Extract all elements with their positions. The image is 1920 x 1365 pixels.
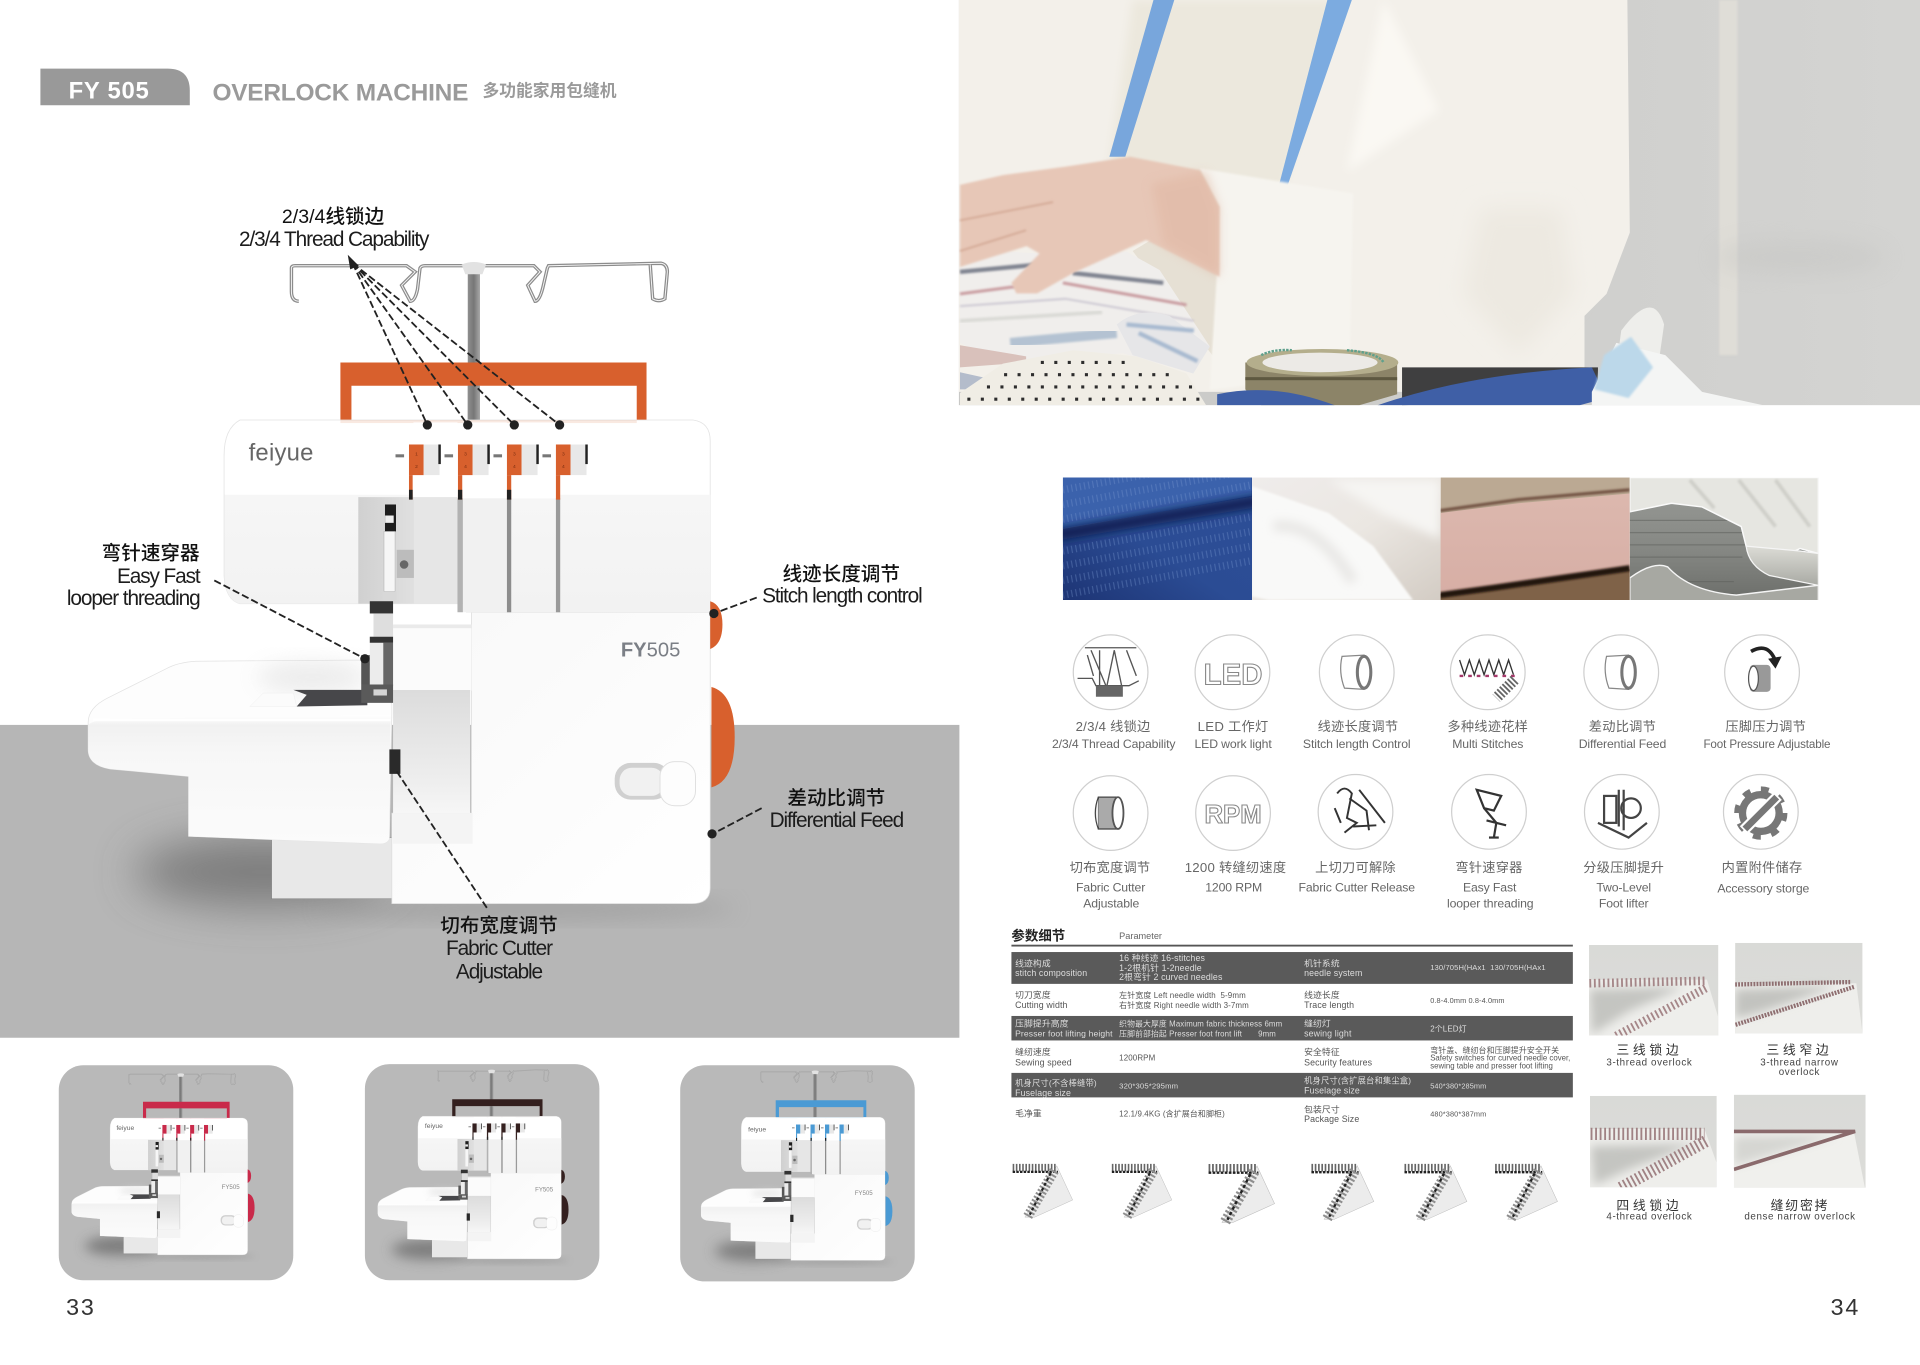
parameter table: 缝纫灯 [1304, 1018, 1331, 1029]
thumbnail: red variant: FY505 [222, 1184, 240, 1191]
parameter table: 线迹构成 [1015, 958, 1051, 969]
feature: LED: LED 工作灯 [1198, 719, 1268, 734]
parameter table: 1200RPM [1119, 1053, 1155, 1062]
parameter table: 织物最大厚度 Maximum fabric thickness 6mm [1119, 1019, 1282, 1029]
feature: RPM: RPM [1204, 801, 1262, 829]
feature: two-level lifter [1583, 774, 1664, 910]
parameter table: Package Size [1304, 1114, 1359, 1124]
callout text: thread capability [239, 206, 430, 251]
floor band behind machine [0, 725, 959, 1038]
callout: looper threading: looper threading [67, 587, 200, 610]
feature: RPM: 1200 转缝纫速度 [1185, 860, 1286, 875]
parameter table: Presser foot lifting height [1015, 1029, 1113, 1039]
hero sewing machine: 4 [464, 464, 467, 470]
page number 33: 33 [66, 1294, 96, 1320]
stitch sample: 3-thread narrow [1735, 943, 1862, 1078]
parameter table: Fuselage size [1304, 1085, 1360, 1095]
feature: 2/3/4 thread: 2/3/4 Thread Capability [1052, 737, 1176, 751]
stitch sample: 4-thread overlock: 4-thread overlock [1606, 1212, 1692, 1223]
feature: multi stitches: 多种线迹花样 [1447, 718, 1528, 734]
parameter table: 16 种线迹 16-stitches [1119, 952, 1205, 963]
feature: foot pressure: 压脚压力调节 [1725, 719, 1806, 734]
thumbnail: red variant: feiyue [116, 1125, 135, 1132]
feature: multi stitches [1447, 635, 1528, 751]
feature: foot pressure: Foot Pressure Adjustable [1703, 738, 1830, 751]
hero sewing machine [88, 262, 735, 918]
callout: looper threading: Easy Fast [117, 565, 201, 588]
callout: looper threading: 弯针速穿器 [102, 543, 200, 565]
feature: cutter width: 切布宽度调节 [1070, 859, 1150, 875]
product title [212, 79, 617, 106]
feature: accessory storage [1717, 774, 1810, 896]
feature: RPM: 1200 RPM [1205, 880, 1262, 894]
stitch sample: 3-thread narrow: overlock [1779, 1067, 1820, 1078]
hero sewing machine: 1 [415, 452, 418, 458]
parameter table: 压脚提升高度 [1015, 1018, 1069, 1029]
parameter table: sewing light [1304, 1029, 1352, 1039]
hero sewing machine: 3 [464, 452, 467, 458]
parameter table: 2个LED灯 [1430, 1024, 1467, 1034]
feature: 2/3/4 thread: 2/3/4 线锁边 [1076, 719, 1151, 734]
hero sewing machine: 4 [513, 464, 516, 470]
parameter table heading: 参数细节 [1011, 927, 1065, 943]
feature: two-level lifter: Foot lifter [1599, 896, 1649, 910]
stitch sample: 3-thread narrow: 3-thread narrow [1760, 1057, 1839, 1068]
parameter table: Sewing speed [1015, 1057, 1072, 1067]
parameter table: 机针系统 [1304, 958, 1340, 969]
feature: cutter width: Fabric Cutter [1076, 880, 1145, 894]
callout: thread capability leaders [348, 255, 564, 430]
parameter table: 1-2根机针 1-2needle [1119, 962, 1202, 973]
callout: differential feed: 差动比调节 [787, 787, 885, 809]
stitch sample: 3-thread overlock: 三线锁边 [1616, 1042, 1682, 1057]
feature: looper threader: looper threading [1447, 896, 1534, 910]
parameter table: 左针宽度 Left needle width 5-9mm [1119, 990, 1246, 1000]
callout: differential feed: Differential Feed [770, 809, 904, 832]
thumbnail: red variant [59, 1065, 293, 1280]
stitch sample: 4-thread overlock [1589, 1096, 1717, 1223]
feature: LED: LED work light [1194, 737, 1272, 751]
parameter table: Security features [1304, 1057, 1373, 1067]
callout: looper threading [67, 543, 370, 663]
feature: cutter release: 上切刀可解除 [1315, 860, 1396, 875]
feature: foot pressure [1703, 635, 1830, 751]
product title: OVERLOCK MACHINE [212, 79, 468, 106]
parameter table heading: Parameter [1119, 931, 1162, 941]
parameter table: 切刀宽度 [1015, 989, 1051, 1000]
feature: accessory storage: Accessory storge [1717, 882, 1810, 896]
stitch sample: 3-thread narrow: 三线窄边 [1766, 1042, 1832, 1057]
parameter table: 480*380*387mm [1430, 1110, 1486, 1119]
parameter table: 包装尺寸 [1304, 1103, 1340, 1114]
feature: looper threader: 弯针速穿器 [1455, 859, 1523, 875]
callout text: thread capability: 2/3/4 Thread Capability [239, 228, 430, 251]
stitch sample: 3-thread overlock: 3-thread overlock [1606, 1057, 1692, 1068]
callout: stitch length [709, 563, 922, 618]
callout: differential feed [707, 787, 904, 839]
parameter table heading [1011, 927, 1573, 947]
thumbnail: blue variant [680, 1065, 915, 1281]
parameter table: 机身尺寸(含扩展台和集尘盒) [1304, 1076, 1411, 1086]
hero photo: tailor with measuring tape [959, 0, 1920, 405]
parameter table: 缝纫速度 [1015, 1046, 1051, 1057]
callout: fabric cutter [397, 771, 558, 983]
feature: stitch length [1303, 635, 1411, 751]
thumbnail: dark brown variant: feiyue [425, 1123, 443, 1130]
stitch sample: 4-thread overlock: 四线锁边 [1616, 1198, 1682, 1213]
feature: stitch length: Stitch length Control [1303, 737, 1411, 751]
parameter table: 2根弯针 2 curved needles [1119, 971, 1223, 982]
callout: fabric cutter: 切布宽度调节 [440, 915, 558, 937]
hero sewing machine: 3 [562, 452, 565, 458]
fabric swatch: pink cotton [1440, 478, 1630, 606]
hero sewing machine: 4 [562, 464, 565, 470]
hero sewing machine: FY505 [621, 639, 680, 661]
parameter table: needle system [1304, 968, 1362, 978]
parameter table: 弯针盖、缝纫台和压脚提升安全开关 [1430, 1045, 1559, 1055]
model tab heading: FY 505 [69, 78, 149, 105]
thumbnail: dark brown variant: FY505 [535, 1186, 554, 1193]
parameter table: 安全特征 [1304, 1046, 1340, 1057]
stitch sample: dense narrow [1734, 1095, 1866, 1223]
feature: 2/3/4 thread [1052, 635, 1176, 751]
feature: LED: LED [1204, 658, 1262, 691]
fabric swatch: white terry [1251, 478, 1441, 600]
parameter table: 320*305*295mm [1119, 1082, 1178, 1091]
feature: two-level lifter: Two-Level [1596, 880, 1651, 894]
feature: cutter width [1070, 776, 1150, 910]
parameter table: 12.1/9.4KG (含扩展台和脚柜) [1119, 1109, 1225, 1119]
parameter table: Cutting width [1015, 1000, 1068, 1010]
callout: fabric cutter: Adjustable [456, 960, 543, 983]
parameter table: Fuselage size [1015, 1088, 1071, 1098]
callout text: thread capability: 2/3/4线锁边 [282, 206, 385, 228]
parameter table: Safety switches for curved needle cover, [1430, 1053, 1570, 1062]
parameter table: 机身尺寸(不含棒缝带) [1015, 1078, 1097, 1088]
stitch sample: dense narrow: 缝纫密拷 [1771, 1198, 1829, 1213]
product title: 多功能家用包缝机 [482, 81, 617, 101]
parameter table: 130/705H(HAx1 130/705H(HAx1 [1430, 963, 1546, 972]
model tab heading [40, 69, 190, 105]
feature: looper threader: Easy Fast [1463, 880, 1517, 894]
feature: differential feed [1579, 635, 1666, 751]
parameter table: 压脚前部抬起 Presser foot front lift 9mm [1119, 1029, 1276, 1039]
parameter table: 线迹长度 [1304, 989, 1340, 1000]
hero sewing machine: feiyue [249, 439, 314, 466]
callout: stitch length: 线迹长度调节 [782, 563, 900, 585]
parameter table: 540*380*285mm [1430, 1082, 1486, 1091]
callout: stitch length: Stitch length control [762, 584, 922, 607]
feature: multi stitches: Multi Stitches [1452, 737, 1523, 751]
parameter table: Trace length [1304, 1000, 1354, 1010]
stitch diagrams row [1013, 1166, 1558, 1223]
feature: differential feed: 差动比调节 [1589, 719, 1656, 734]
parameter table: stitch composition [1015, 968, 1087, 978]
thumbnail: dark brown variant [365, 1064, 599, 1280]
parameter table: 右针宽度 Right needle width 3-7mm [1119, 1000, 1249, 1010]
parameter table [1011, 952, 1573, 1124]
feature: cutter release: Fabric Cutter Release [1299, 880, 1415, 894]
parameter table: sewing table and presser foot lifting [1430, 1061, 1553, 1070]
feature: LED [1194, 635, 1272, 751]
parameter table: 0.8-4.0mm 0.8-4.0mm [1430, 996, 1505, 1005]
feature: cutter release [1299, 774, 1415, 894]
fabric swatch: blue denim [1062, 478, 1252, 600]
feature: stitch length: 线迹长度调节 [1318, 719, 1398, 734]
hero sewing machine: 3 [513, 452, 516, 458]
page number 34: 34 [1831, 1294, 1860, 1320]
fabric swatch: grey organza [1630, 478, 1818, 606]
feature: two-level lifter: 分级压脚提升 [1583, 860, 1664, 875]
feature: RPM [1185, 776, 1286, 894]
stitch sample: 3-thread overlock [1588, 945, 1718, 1068]
feature: cutter width: Adjustable [1083, 896, 1139, 910]
parameter table: 毛净重 [1015, 1108, 1042, 1119]
thumbnail: blue variant: FY505 [855, 1190, 873, 1197]
hero sewing machine: 2 [415, 464, 418, 470]
feature: accessory storage: 内置附件储存 [1722, 860, 1802, 875]
feature: differential feed: Differential Feed [1579, 737, 1666, 751]
callout: fabric cutter: Fabric Cutter [446, 937, 553, 960]
thumbnail: blue variant: feiyue [748, 1126, 766, 1133]
stitch sample: dense narrow: dense narrow overlock [1744, 1212, 1856, 1223]
feature: looper threader [1447, 774, 1534, 910]
